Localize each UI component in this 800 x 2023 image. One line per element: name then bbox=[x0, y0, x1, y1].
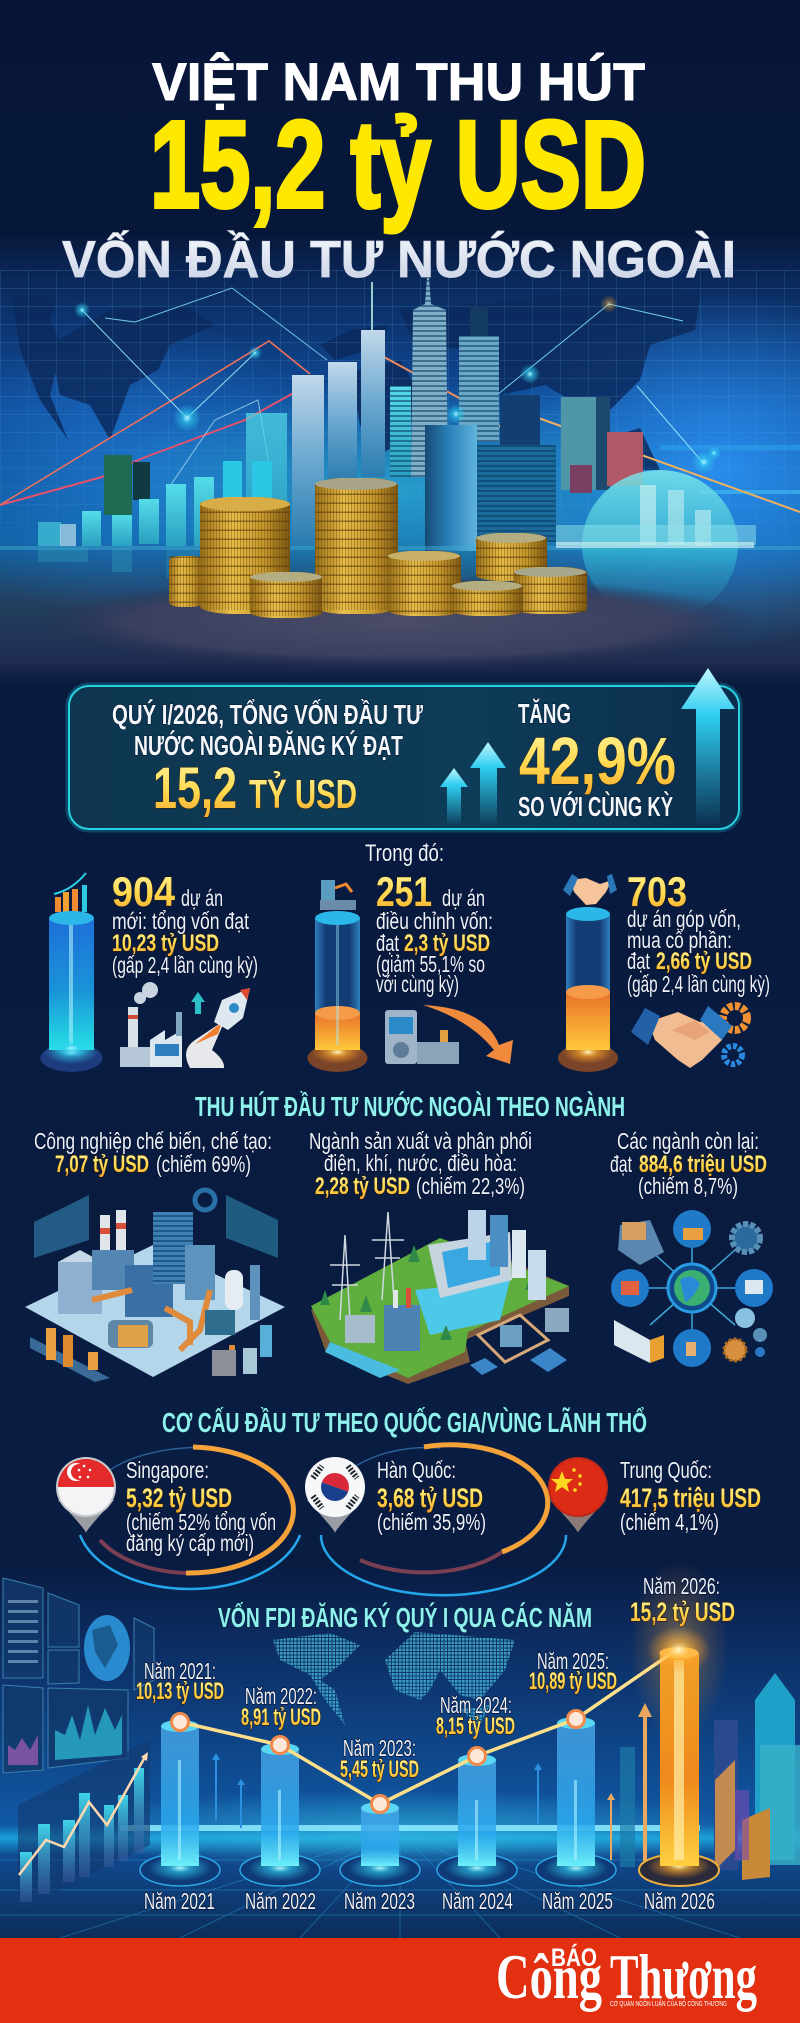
text: other sectors bbox=[610, 1128, 767, 1199]
icon: Singapore flag pin bbox=[56, 1457, 116, 1533]
text: capital contribution projects: mua cổ phần: bbox=[627, 927, 732, 953]
left dashboard screens bbox=[3, 1578, 154, 1773]
rings behind country data bbox=[80, 1445, 566, 1595]
axis labels bbox=[144, 1888, 715, 1914]
icon: factory and rocket bbox=[120, 982, 250, 1068]
value labels: Năm 2021: bbox=[144, 1658, 216, 1684]
cylinder low bbox=[308, 911, 368, 1072]
value labels: 8,91 tỷ USD bbox=[241, 1704, 321, 1731]
axis labels: Năm 2025 bbox=[542, 1888, 613, 1914]
axis labels: Năm 2023 bbox=[344, 1888, 415, 1914]
bar 2023 bbox=[340, 1802, 420, 1886]
text: capital contribution projects bbox=[627, 868, 770, 997]
panel: capital contribution projects bbox=[558, 868, 770, 1072]
axis labels: Năm 2026 bbox=[644, 1888, 715, 1914]
title bbox=[62, 51, 736, 289]
market trend lines bbox=[0, 288, 800, 512]
text: adjusted projects: với cùng kỳ) bbox=[376, 971, 459, 997]
dotted world map bbox=[273, 1632, 515, 1725]
logo: Báo Công Thương: CƠ QUAN NGÔN LUẬN CỦA BỘ CÔNG THƯƠNG bbox=[610, 1999, 727, 2008]
text: other sectors: đạt bbox=[610, 1151, 632, 1177]
axis labels: Năm 2021 bbox=[144, 1888, 215, 1914]
text: China: (chiếm 4,1%) bbox=[620, 1509, 719, 1535]
value labels: 10,13 tỷ USD bbox=[136, 1678, 224, 1705]
panel: adjusted projects bbox=[308, 868, 513, 1072]
text: manufacturing: (chiếm 69%) bbox=[156, 1151, 251, 1177]
icon: handshake and gears bbox=[631, 1006, 747, 1068]
value labels: Năm 2025: bbox=[537, 1648, 609, 1674]
text: Singapore: đăng ký cấp mới) bbox=[126, 1530, 254, 1556]
panel text right bbox=[518, 698, 676, 822]
text: South Korea: 3,68 tỷ USD bbox=[377, 1483, 483, 1513]
text: energy: 2,28 tỷ USD bbox=[315, 1173, 410, 1200]
text: adjusted projects: (giảm 55,1% so bbox=[376, 951, 485, 977]
title line 3: VỐN ĐẦU TƯ NƯỚC NGOÀI bbox=[62, 230, 736, 289]
cylinder full bbox=[40, 911, 102, 1072]
bar 2021 bbox=[140, 1720, 220, 1886]
value labels: 5,45 tỷ USD bbox=[340, 1756, 419, 1783]
icon: growth chart bbox=[54, 873, 87, 912]
glass dome bbox=[556, 470, 756, 620]
cylinder medium bbox=[558, 907, 618, 1072]
footer bar bbox=[0, 1938, 800, 2023]
axis labels: Năm 2022 bbox=[245, 1888, 316, 1914]
panel text left: NƯỚC NGOÀI ĐĂNG KÝ ĐẠT bbox=[134, 730, 403, 761]
text: new projects: (gấp 2,4 lần cùng kỳ) bbox=[112, 952, 258, 978]
bar chart blocks bbox=[0, 455, 800, 578]
panel text right: SO VỚI CÙNG KỲ bbox=[518, 791, 673, 822]
axis labels: Năm 2024 bbox=[442, 1888, 513, 1914]
value labels: Năm 2024: bbox=[440, 1692, 512, 1718]
panel text left: QUÝ I/2026, TỔNG VỐN ĐẦU TƯ bbox=[112, 698, 424, 730]
icon: isometric hydro power bbox=[311, 1210, 569, 1384]
text: new projects: dự án bbox=[181, 885, 223, 911]
value labels: 8,15 tỷ USD bbox=[436, 1713, 515, 1740]
text: China: Trung Quốc: bbox=[620, 1457, 712, 1483]
right city skyline bbox=[620, 1673, 800, 1880]
arrow icons rising bbox=[440, 668, 735, 826]
text: adjusted projects bbox=[376, 868, 493, 997]
trend markers bbox=[172, 1626, 711, 1812]
text: energy: điện, khí, nước, điều hòa: bbox=[324, 1150, 517, 1176]
heading: FDI by year: VỐN FDI ĐĂNG KÝ QUÝ I QUA CÁC NĂM bbox=[218, 1601, 592, 1633]
background: FDI chart scene bbox=[0, 1555, 800, 1940]
text: capital contribution projects: dự án góp vốn, bbox=[627, 906, 741, 932]
text: capital contribution projects: 2,66 tỷ USD bbox=[656, 948, 752, 975]
trend line bbox=[180, 1648, 679, 1804]
text: energy: Ngành sản xuất và phân phối bbox=[309, 1128, 532, 1154]
panel text left: TỶ USD bbox=[249, 771, 357, 817]
ground platform bbox=[40, 576, 760, 668]
text: Singapore: 5,32 tỷ USD bbox=[126, 1483, 232, 1513]
icon: robot machine bbox=[320, 880, 356, 910]
panel: new projects bbox=[40, 868, 258, 1072]
icon: isometric factory bbox=[25, 1190, 285, 1382]
text: adjusted projects: 251 bbox=[376, 868, 432, 915]
icon: China flag pin bbox=[548, 1457, 608, 1533]
text: adjusted projects: dự án bbox=[442, 885, 485, 911]
value labels: Năm 2026: bbox=[643, 1573, 720, 1599]
text: China bbox=[620, 1457, 761, 1535]
text: South Korea: Hàn Quốc: bbox=[377, 1457, 456, 1483]
text: Singapore: Singapore: bbox=[126, 1457, 209, 1483]
logo: Báo Công Thương: Công bbox=[496, 1941, 602, 2012]
value labels: 10,89 tỷ USD bbox=[529, 1668, 617, 1695]
logo: Báo Công Thương bbox=[496, 1941, 757, 2012]
skyline buildings bbox=[246, 278, 643, 551]
hero illustration: skyline with coins bbox=[0, 230, 800, 685]
icon: small handshake bbox=[563, 874, 617, 905]
panel text right: 42,9% bbox=[519, 724, 676, 799]
text: adjusted projects: điều chỉnh vốn: bbox=[376, 908, 493, 934]
text: adjusted projects: đạt bbox=[376, 930, 399, 956]
panel: South Korea bbox=[305, 1457, 486, 1535]
text: new projects: 904 bbox=[112, 868, 176, 915]
panel: other sectors bbox=[610, 1128, 773, 1367]
icon: business network bbox=[611, 1210, 773, 1367]
gold coin stacks bbox=[169, 478, 587, 618]
text: capital contribution projects: 703 bbox=[627, 868, 687, 915]
text: new projects: 10,23 tỷ USD bbox=[112, 930, 219, 957]
text: Singapore bbox=[126, 1457, 276, 1556]
logo: Báo Công Thương: BÁO bbox=[551, 1943, 597, 1972]
panel text left bbox=[112, 698, 424, 821]
text: manufacturing: Công nghiệp chế biến, chế tạo: bbox=[34, 1128, 272, 1154]
bar 2024 bbox=[437, 1754, 517, 1886]
panel: manufacturing sector bbox=[25, 1128, 285, 1382]
bar 2025 bbox=[536, 1717, 616, 1886]
text: Singapore: (chiếm 52% tổng vốn bbox=[126, 1509, 276, 1535]
bar 2026 bbox=[629, 1560, 729, 1886]
text: new projects bbox=[112, 868, 258, 978]
text: manufacturing bbox=[34, 1128, 272, 1178]
background arrows bbox=[212, 1703, 652, 1862]
panel: quarterly total bbox=[69, 668, 739, 829]
value labels bbox=[136, 1573, 735, 1783]
text: South Korea: (chiếm 35,9%) bbox=[377, 1509, 486, 1535]
value labels: Năm 2023: bbox=[343, 1735, 416, 1761]
left rising bar chart bbox=[18, 1740, 150, 1910]
text: capital contribution projects: đạt bbox=[627, 948, 650, 974]
bar chart: FDI by year bbox=[136, 1560, 735, 1914]
bar 2022 bbox=[240, 1743, 320, 1886]
text: South Korea bbox=[377, 1457, 486, 1535]
text: energy: (chiếm 22,3%) bbox=[416, 1173, 525, 1199]
text: adjusted projects: 2,3 tỷ USD bbox=[404, 930, 490, 957]
panel: China bbox=[548, 1457, 761, 1535]
text: manufacturing: 7,07 tỷ USD bbox=[55, 1151, 149, 1178]
text: in which: Trong đó: bbox=[365, 840, 444, 867]
title line 1: VIỆT NAM THU HÚT bbox=[152, 51, 645, 112]
panel text left: 15,2 bbox=[153, 756, 237, 821]
icon: Korea flag pin bbox=[305, 1457, 365, 1533]
panel: energy sector bbox=[309, 1128, 569, 1384]
panel text right: TĂNG bbox=[518, 698, 571, 729]
value labels: 15,2 tỷ USD bbox=[630, 1597, 735, 1627]
value labels: Năm 2022: bbox=[245, 1683, 317, 1709]
text: other sectors: (chiếm 8,7%) bbox=[638, 1173, 738, 1199]
text: new projects: mới: tổng vốn đạt bbox=[112, 908, 249, 934]
glow dots bbox=[74, 295, 721, 474]
panel: Singapore bbox=[56, 1457, 276, 1556]
icon: machine and down arrow bbox=[385, 1005, 513, 1064]
text: energy bbox=[309, 1128, 532, 1200]
